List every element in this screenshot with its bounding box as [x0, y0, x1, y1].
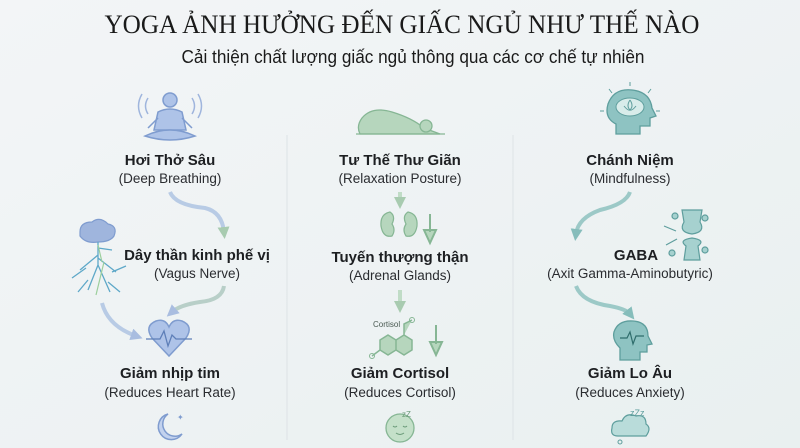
text: Reduces Anxiety: (Reduces Anxiety): [575, 385, 685, 400]
heading: Chánh Niệm: Chánh Niệm: [586, 152, 674, 169]
heading: Hơi Thở Sâu: Hơi Thở Sâu: [125, 152, 215, 169]
heading: Tư Thế Thư Giãn: Tư Thế Thư Giãn: [339, 152, 461, 169]
heading: Giảm Cortisol: Giảm Cortisol: [351, 365, 449, 382]
icon: mindful head: [600, 82, 660, 134]
arrow: nerve to heart: [102, 303, 136, 336]
heading: vagus nerve: Dây thần kinh phế vị: [124, 247, 270, 264]
column: deep breathing: [72, 93, 270, 440]
heading: adrenal glands: Tuyến thượng thận: [331, 249, 469, 266]
text: Mindfulness: (Mindfulness): [589, 171, 671, 186]
arrow: mindfulness to GABA: [576, 192, 630, 234]
arrow: GABA to anxiety: [576, 286, 630, 314]
arrow: down 1: [398, 192, 402, 202]
text: Adrenal Glands: (Adrenal Glands): [349, 268, 451, 283]
column: mindfulness: [547, 82, 713, 444]
icon: calm head: [614, 321, 652, 360]
text: Relaxation Posture: (Relaxation Posture): [338, 171, 462, 186]
icon: cortisol molecule: Cortisol: [373, 320, 400, 329]
icon: kidneys with down arrow: [381, 212, 436, 243]
icon: sleepy face: [386, 410, 414, 442]
icon: moon: ✦: [177, 413, 184, 422]
icon: heart: [146, 320, 192, 356]
icon: sleep cloud: [612, 408, 649, 444]
text: Reduces Heart Rate: (Reduces Heart Rate): [104, 385, 236, 400]
text: Vagus Nerve: (Vagus Nerve): [154, 266, 240, 281]
title: YOGA ẢNH HƯỞNG ĐẾN GIẤC NGỦ NHƯ THẾ NÀO: [104, 10, 700, 39]
arrow: vagus to heart: [172, 286, 224, 312]
icon: sleepy face: zZ: [402, 410, 411, 419]
heading: GABA: GABA: [614, 247, 658, 264]
arrow: down 2: [398, 290, 402, 306]
icon: sleep cloud: zZz: [630, 408, 645, 418]
arrow: breathing to vagus: [170, 192, 224, 232]
icon: meditating person: [138, 93, 202, 140]
text: Gamma-Aminobutyric acid: (Axit Gamma-Aminobutyric): [547, 266, 713, 281]
column: relaxation posture: [331, 110, 469, 442]
text: Reduces Cortisol: (Reduces Cortisol): [344, 385, 456, 400]
icon: brain with vagus nerve: [72, 219, 126, 295]
icon: GABA synapse: [664, 210, 708, 260]
icon: child's pose: [356, 110, 445, 134]
heading: Giảm nhịp tim: Giảm nhịp tim: [120, 365, 220, 382]
heading: Giảm Lo Âu: Giảm Lo Âu: [588, 364, 672, 382]
text: Deep Breathing: (Deep Breathing): [119, 171, 221, 186]
icon: moon: [158, 413, 184, 440]
icon: cortisol molecule: [370, 318, 442, 358]
subtitle: Cải thiện chất lượng giấc ngủ thông qua các cơ chế tự nhiên: [182, 47, 644, 67]
